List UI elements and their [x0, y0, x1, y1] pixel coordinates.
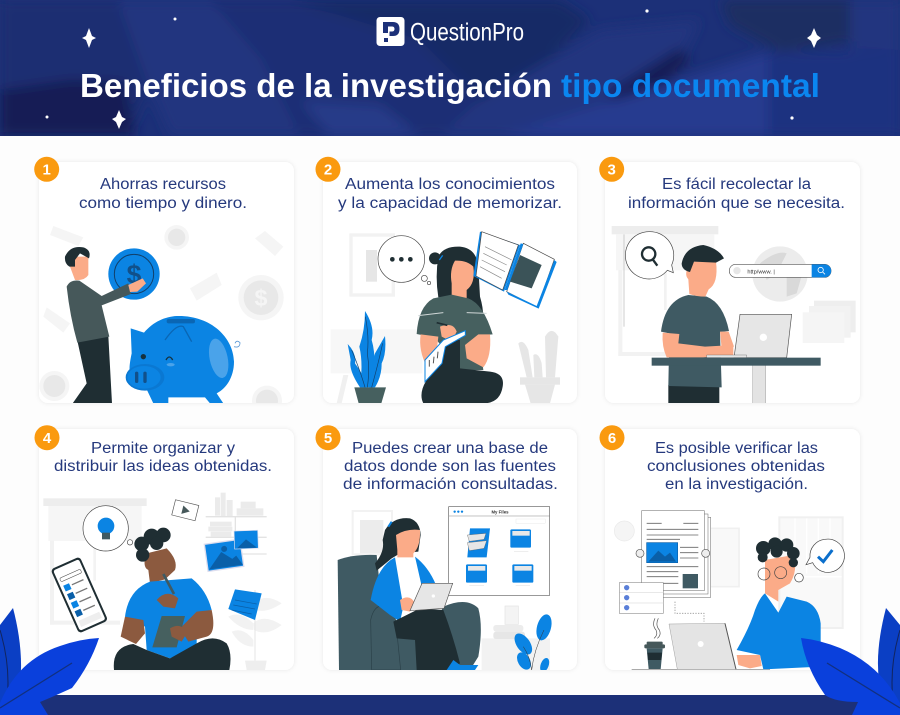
text 5: Puedes crear una base de — [352, 440, 548, 457]
text 6: conclusiones obtenidas — [647, 458, 825, 475]
badge 6 — [600, 425, 624, 450]
badge 4 — [34, 425, 60, 450]
badge 2: 2 — [324, 162, 332, 178]
panel 5: base de datos — [316, 425, 577, 673]
illustration: man and piggy bank: $ — [255, 285, 268, 311]
illustration: woman in armchair with file window — [338, 507, 554, 673]
illustration: woman in armchair with file window: My Files — [491, 510, 509, 515]
illustration: man at laptop — [612, 226, 856, 403]
illustration: man with phone and notepad — [43, 493, 282, 670]
badge 6: 6 — [608, 430, 616, 447]
right leaves — [801, 608, 900, 715]
header banner — [0, 0, 900, 136]
badge 1 — [34, 157, 59, 182]
panel 1: ahorra recursos — [34, 157, 294, 416]
text 5: de información consultadas. — [343, 476, 558, 493]
illustration: man at laptop: http/www. | — [747, 269, 775, 275]
badge 1: 1 — [43, 162, 51, 178]
badge 5 — [316, 425, 340, 450]
title: tipo documental — [561, 67, 820, 104]
badge 3: 3 — [608, 162, 616, 178]
text 2: y la capacidad de memorizar. — [338, 195, 562, 212]
illustration: woman with book — [331, 232, 560, 403]
text 3: información que se necesita. — [628, 195, 845, 212]
badge 4: 4 — [43, 430, 52, 447]
logo: QuestionPro — [376, 17, 524, 46]
text 5 — [343, 440, 558, 493]
footer bar — [0, 695, 900, 715]
title: Beneficios de la investigación — [80, 67, 552, 104]
text 4 — [54, 440, 272, 475]
illustration: woman verifying document — [614, 511, 844, 669]
text 6 — [647, 440, 825, 493]
text 4: distribuir las ideas obtenidas. — [54, 458, 272, 475]
badge 2 — [316, 157, 340, 182]
panel 3: recolectar informacion — [599, 157, 860, 403]
illustration: man and piggy bank: $ — [127, 259, 142, 289]
panel 6: verificar conclusiones — [600, 425, 860, 670]
illustration: man and piggy bank — [39, 225, 284, 416]
panel 2: aumenta conocimientos — [316, 157, 577, 403]
badge 3 — [599, 157, 624, 182]
panel 4: organizar ideas — [34, 425, 294, 670]
text 1: Ahorras recursos — [100, 176, 226, 193]
text 3: Es fácil recolectar la — [662, 176, 811, 193]
sparkles — [46, 9, 821, 129]
text 3 — [628, 176, 845, 212]
text 2 — [338, 176, 562, 212]
text 2: Aumenta los conocimientos — [345, 176, 555, 193]
text 5: datos donde son las fuentes — [344, 458, 556, 475]
text 1: como tiempo y dinero. — [79, 195, 247, 212]
logo: QuestionPro: QuestionPro — [410, 18, 524, 46]
text 6: Es posible verificar las — [655, 440, 818, 457]
left leaves — [0, 608, 99, 715]
text 4: Permite organizar y — [91, 440, 235, 457]
badge 5: 5 — [324, 430, 332, 447]
text 6: en la investigación. — [665, 476, 808, 493]
text 1 — [79, 176, 247, 212]
